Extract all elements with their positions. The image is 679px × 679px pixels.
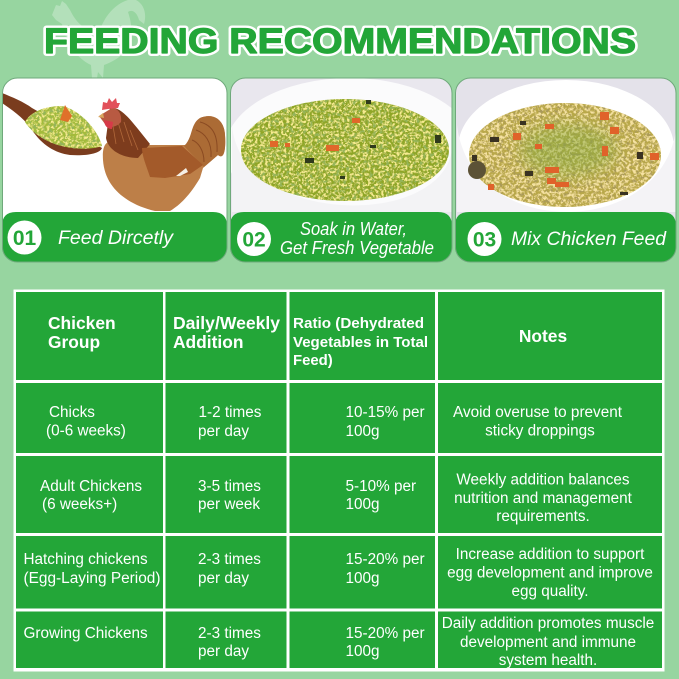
- caption 2: Get Fresh Vegetable: [280, 238, 434, 258]
- table header row: Vegetables in Total: [293, 335, 428, 351]
- badge 02: [237, 222, 271, 256]
- row: adult chickens: (6 weeks+): [42, 496, 117, 513]
- icon: bowl of mixed feed: [457, 80, 676, 216]
- icon: bowl of soaked vegetables: [231, 78, 452, 212]
- table header row: Notes: [519, 326, 567, 346]
- table header row: Chicken: [48, 313, 116, 333]
- row: chicks: 1-2 times: [198, 404, 262, 421]
- row: growing chickens: Daily addition promotes muscle: [442, 615, 654, 632]
- panel: step 3 mix chicken feed: [455, 78, 676, 262]
- footer band 1: [2, 212, 227, 262]
- row: adult chickens: 100g: [346, 496, 380, 513]
- row: adult chickens: 5-10% per: [346, 478, 416, 495]
- badge 01: [8, 220, 42, 254]
- row: chicks: 10-15% per: [346, 404, 425, 421]
- row: adult chickens: [40, 472, 633, 525]
- row: chicks: sticky droppings: [485, 422, 595, 440]
- row: chicks: (0-6 weeks): [46, 422, 126, 440]
- title: FEEDING RECOMMENDATIONS: [44, 21, 636, 61]
- row: growing chickens: 2-3 times: [198, 625, 261, 642]
- row: hatching chickens: 15-20% per: [346, 551, 425, 568]
- row: hatching chickens: [24, 546, 653, 600]
- badge 03: [468, 222, 502, 256]
- row: chicks: 100g: [346, 423, 380, 440]
- row: growing chickens: system health.: [499, 652, 597, 669]
- table header row: Feed): [293, 353, 333, 369]
- row: hatching chickens: egg quality.: [511, 583, 589, 600]
- panel: step 1 feed directly: [2, 78, 227, 262]
- title: FEEDING RECOMMENDATIONS: [44, 21, 636, 61]
- row: adult chickens: Weekly addition balances: [456, 472, 630, 488]
- row: hatching chickens: Hatching chickens: [24, 551, 148, 568]
- row: hatching chickens: 2-3 times: [198, 551, 261, 568]
- row: growing chickens: [24, 615, 654, 669]
- row: growing chickens: Growing Chickens: [24, 625, 148, 642]
- table header row: Daily/Weekly: [173, 313, 280, 333]
- row: hatching chickens: Increase addition to support: [456, 546, 645, 563]
- row: growing chickens: 15-20% per: [346, 625, 425, 642]
- rooster watermark: [52, 0, 145, 78]
- row: adult chickens: Adult Chickens: [40, 478, 142, 495]
- row: hatching chickens: (Egg-Laying Period): [24, 570, 160, 587]
- caption 3: Mix Chicken Feed: [511, 229, 667, 250]
- table header row: Addition: [173, 332, 244, 352]
- row: chicks: Chicks: [49, 404, 95, 421]
- badge 02: 02: [242, 228, 266, 252]
- row: adult chickens: requirements.: [496, 508, 590, 525]
- table header row: [48, 313, 567, 369]
- panel: step 2 soak in water: [230, 78, 452, 262]
- icon: wooden spoon with vegetables: [2, 93, 102, 155]
- row: chicks: [46, 404, 623, 440]
- table header row: Group: [48, 332, 100, 352]
- caption 2: [280, 219, 434, 258]
- row: hatching chickens: 100g: [346, 570, 380, 587]
- badge 03: 03: [473, 228, 496, 252]
- row: growing chickens: development and immune: [460, 634, 636, 651]
- row: growing chickens: per day: [198, 643, 249, 660]
- row: adult chickens: per week: [198, 496, 260, 513]
- row: chicks: Avoid overuse to prevent: [453, 404, 623, 421]
- footer band 3: [455, 212, 676, 262]
- row: adult chickens: 3-5 times: [198, 478, 261, 495]
- row: chicks: per day: [198, 423, 249, 440]
- table: feeding schedule: [14, 290, 664, 672]
- footer band 2: [230, 212, 452, 262]
- badge 01: 01: [13, 227, 36, 250]
- row: hatching chickens: per day: [198, 570, 249, 587]
- table header row: Ratio (Dehydrated: [293, 316, 424, 332]
- row: hatching chickens: egg development and improve: [447, 564, 653, 582]
- row: adult chickens: nutrition and management: [454, 490, 633, 507]
- row: growing chickens: 100g: [346, 643, 380, 660]
- caption 2: Soak in Water,: [300, 219, 407, 239]
- icon: hen: [98, 98, 225, 211]
- caption 1: Feed Dircetly: [58, 228, 175, 249]
